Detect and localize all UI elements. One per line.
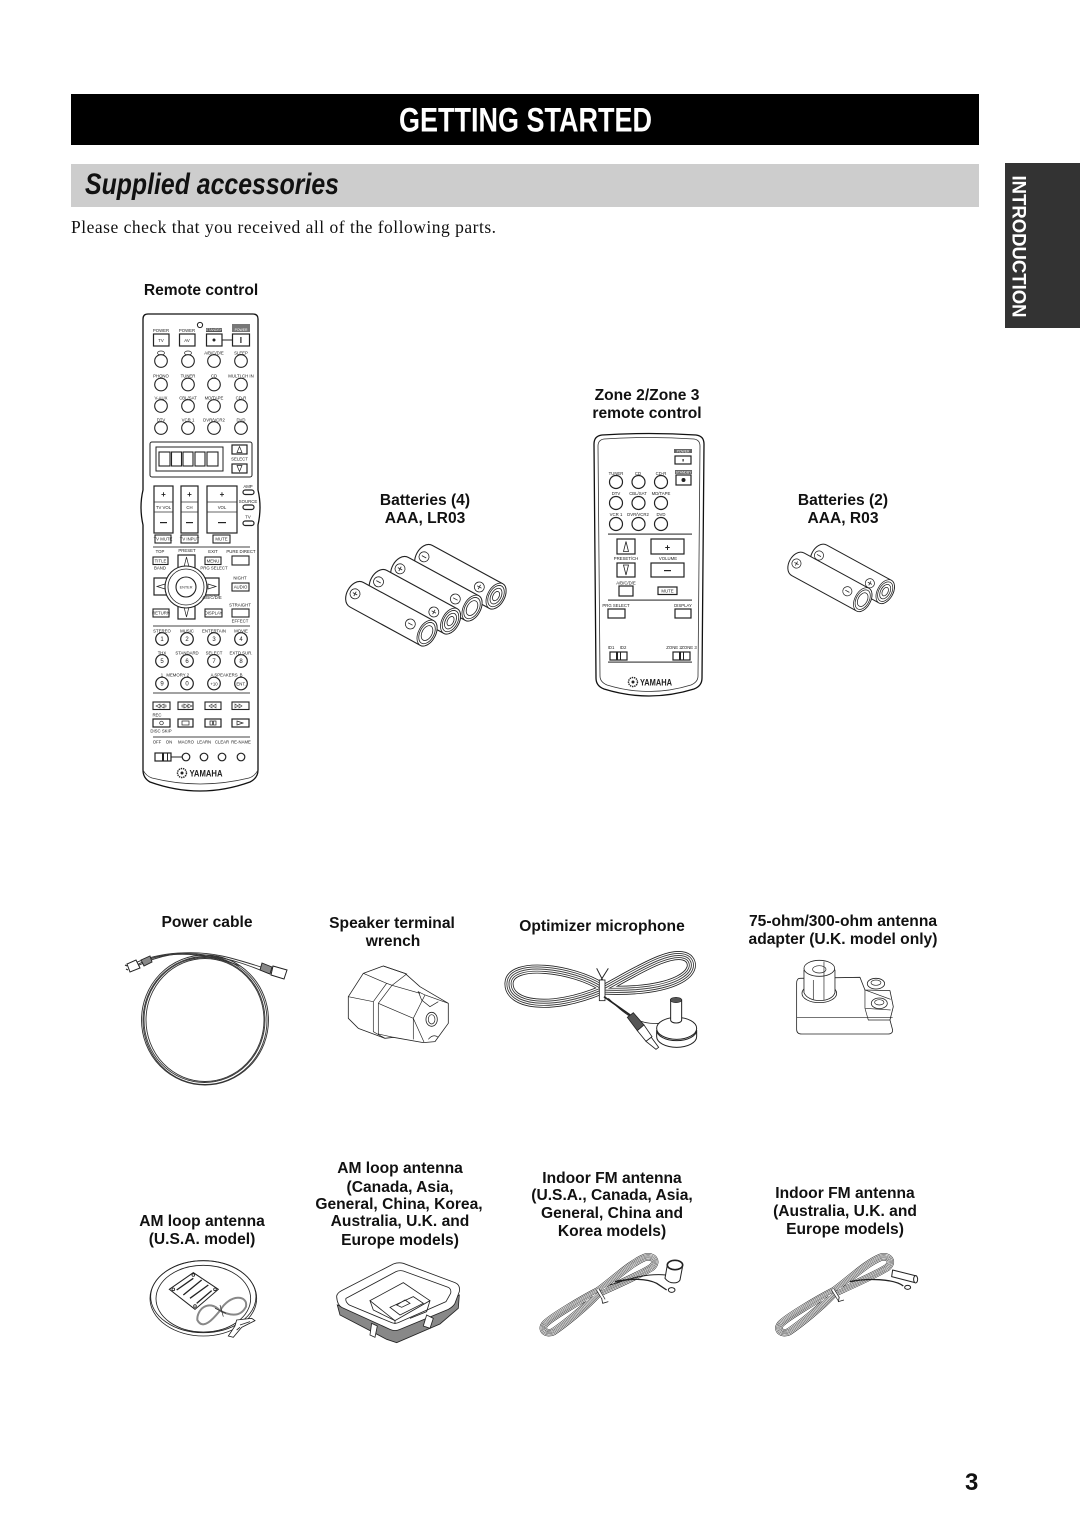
navigation pad: ENTER (180, 586, 193, 590)
volume controls: + (187, 490, 192, 499)
icon: main remote control (141, 314, 260, 791)
icon: two batteries (784, 541, 898, 615)
icon: optimizer microphone (509, 955, 697, 1049)
power buttons: POWER (153, 328, 169, 333)
numeric keypad (153, 628, 252, 694)
title banner (71, 94, 979, 145)
icon: am loop antenna others (337, 1263, 460, 1343)
source buttons: MULTI CH IN (228, 374, 254, 378)
navigation pad: STRAIGHT (229, 602, 251, 608)
zone source buttons: CBL/SAT (629, 491, 647, 496)
icon: four batteries (341, 541, 510, 649)
label: am loop antenna others: Australia, U.K. and (331, 1213, 469, 1230)
source buttons: MD/TAPE (205, 396, 224, 400)
source buttons: DVR/VCR2 (203, 418, 225, 422)
navigation pad: PRG SELECT (200, 566, 228, 570)
icon: am loop antenna us (150, 1261, 257, 1337)
volume controls (154, 484, 257, 533)
logo: yamaha: YAMAHA (640, 678, 672, 688)
zone volume controls: MUTE (661, 588, 674, 594)
zone id switches: ZONE 2 (666, 645, 682, 650)
zone source buttons: CD (635, 471, 641, 476)
macro buttons: ON (166, 740, 172, 744)
title banner: GETTING STARTED (399, 102, 652, 140)
label: indoor fm antenna europe: Indoor FM antenna (775, 1185, 915, 1202)
label: indoor fm antenna asia: Korea models) (558, 1223, 666, 1240)
volume controls: AMP (243, 484, 253, 489)
power buttons: STANDBY (206, 328, 223, 332)
label: batteries 4: AAA, LR03 (385, 510, 466, 527)
icon: zone remote control (594, 434, 704, 696)
zone volume controls: VOLUME (659, 556, 677, 561)
zone volume controls: + (665, 542, 670, 552)
label: zone remote (592, 387, 702, 422)
label: antenna adapter: adapter (U.K. model only) (749, 931, 937, 948)
side tab: introduction (1005, 163, 1080, 328)
navigation pad: PRESET (178, 548, 196, 553)
zone source buttons: CD-R (656, 471, 666, 476)
zone volume controls (602, 539, 692, 618)
power buttons: POWER (235, 328, 248, 332)
numeric keypad: EXTD SUR. (230, 650, 252, 656)
numeric keypad: STEREO (153, 628, 171, 634)
mute row (153, 535, 250, 548)
numeric keypad: 7 (212, 659, 216, 665)
label: am loop antenna others: (Canada, Asia, (347, 1179, 453, 1196)
source buttons: CD (211, 374, 217, 378)
source buttons: CBL/SAT (179, 396, 197, 400)
navigation pad: RETURN (152, 610, 170, 616)
zone id switches: ZONE 3 (681, 645, 697, 650)
mute row: MUTE (215, 536, 228, 542)
label: power cable: Power cable (161, 914, 253, 931)
label: speaker terminal wrench: wrench (365, 933, 420, 950)
numeric keypad: B (240, 672, 243, 678)
macro buttons: RE-NAME (231, 740, 251, 744)
numeric keypad: 0 (185, 682, 189, 688)
power buttons (153, 322, 250, 346)
numeric keypad: 6 (185, 659, 189, 665)
zone volume controls: PRESET/CH (614, 556, 638, 561)
label: indoor fm antenna asia (531, 1170, 693, 1240)
volume controls: + (161, 490, 166, 499)
zone source buttons: POWER (677, 450, 690, 454)
label: antenna adapter: 75-ohm/300-ohm antenna (749, 913, 937, 930)
navigation pad: EXIT (208, 549, 218, 554)
numeric keypad: MOVIE (234, 628, 248, 634)
macro buttons: MACRO (178, 740, 195, 744)
numeric keypad: 1 (161, 672, 164, 678)
numeric keypad: STANDARD (175, 650, 199, 656)
numeric keypad: MEMORY (166, 672, 186, 678)
zone source buttons: MD/TAPE (652, 491, 671, 496)
zone source buttons (608, 449, 692, 535)
label: remote control: Remote control (144, 282, 258, 299)
label: am loop antenna others: AM loop antenna (337, 1160, 463, 1177)
navigation pad: BAND (154, 566, 166, 570)
navigation pad: A/B/C/D/E (202, 595, 222, 600)
label: batteries 2: AAA, R03 (807, 510, 879, 527)
numeric keypad: 8 (239, 659, 243, 665)
zone source buttons: STANDBY (676, 470, 692, 474)
label: zone remote: remote control (592, 405, 702, 422)
zone source buttons: DVD (656, 512, 666, 517)
mute row: TV INPUT (180, 536, 200, 542)
transport buttons (150, 702, 250, 738)
navigation pad: NIGHT (233, 576, 247, 580)
power buttons: TV (158, 338, 164, 343)
zone volume controls: DISPLAY (674, 603, 692, 608)
zone id switches (608, 645, 697, 663)
power buttons: AV (184, 338, 190, 343)
label: antenna adapter (749, 913, 937, 948)
numeric keypad: 5 (160, 659, 164, 665)
label: optimizer microphone: Optimizer microphone (519, 918, 685, 935)
label: batteries 2 (798, 492, 888, 527)
numeric keypad: SELECT (206, 650, 223, 656)
source buttons: A/B/C/D/E (204, 350, 224, 356)
navigation pad (152, 548, 256, 626)
source buttons: SLEEP (234, 350, 248, 356)
label: speaker terminal wrench (329, 915, 455, 950)
label: batteries 4: Batteries (4) (380, 492, 470, 509)
section heading: supplied accessories (71, 164, 979, 207)
logo: yamaha: YAMAHA (190, 768, 223, 780)
volume controls: VOL (218, 505, 227, 510)
zone source buttons: VCR 1 (610, 512, 623, 517)
numeric keypad: 2 (185, 637, 189, 643)
macro buttons: LEARN (197, 740, 211, 744)
numeric keypad: ENT. (236, 682, 246, 686)
intro text: Please check that you received all of the following parts. (71, 217, 496, 237)
source buttons: VCR 1 (182, 418, 195, 422)
zone id switches: ID2 (620, 645, 627, 650)
icon: wrench (348, 966, 448, 1043)
numeric keypad: 3 (212, 637, 216, 643)
zone source buttons: DTV (612, 491, 620, 496)
label: indoor fm antenna europe: (Australia, U.K. and (773, 1203, 917, 1220)
label: indoor fm antenna asia: (U.S.A., Canada, Asia, (531, 1187, 693, 1204)
source buttons: V-AUX (155, 396, 168, 400)
numeric keypad: 9 (160, 682, 164, 688)
source buttons: PHONO (153, 374, 170, 378)
label: speaker terminal wrench: Speaker terminal (329, 915, 455, 932)
numeric keypad: 1 (160, 637, 164, 643)
numeric keypad: ENTERTAIN (202, 628, 226, 634)
numeric keypad: MUSIC (180, 628, 194, 634)
numeric keypad: +10 (210, 682, 218, 686)
numeric keypad: THX (158, 650, 166, 656)
macro buttons: OFF (153, 740, 162, 744)
icon: power cable (125, 953, 287, 1085)
volume controls: + (220, 490, 225, 499)
label: batteries 4 (380, 492, 470, 527)
section heading: supplied accessories: Supplied accessories (85, 168, 339, 201)
macro buttons: CLEAR (215, 740, 229, 744)
display panel: SELECT (231, 456, 248, 462)
transport buttons: REC (152, 712, 162, 718)
power buttons: POWER (179, 328, 195, 333)
numeric keypad: 4 (239, 637, 243, 643)
source buttons: DTV (157, 418, 165, 422)
page number: 3 (965, 1469, 978, 1496)
macro buttons (153, 740, 251, 761)
label: indoor fm antenna europe (773, 1185, 917, 1238)
source buttons: CD-R (236, 396, 246, 400)
label: am loop antenna others: Europe models) (341, 1232, 459, 1249)
label: zone remote: Zone 2/Zone 3 (595, 387, 700, 404)
display panel (150, 442, 252, 477)
zone volume controls: PRG SELECT (602, 603, 630, 608)
label: am loop antenna others: General, China, Korea, (315, 1196, 483, 1213)
numeric keypad: 2 (187, 672, 190, 678)
navigation pad: EFFECT (232, 618, 249, 624)
label: am loop antenna others (315, 1160, 483, 1249)
icon: indoor fm antenna europe (779, 1257, 918, 1333)
label: am loop antenna us: (U.S.A. model) (149, 1231, 255, 1248)
label: indoor fm antenna asia: Indoor FM antenna (542, 1170, 682, 1187)
volume controls: TV (245, 514, 251, 520)
zone source buttons: DVR/VCR2 (627, 512, 649, 517)
label: indoor fm antenna europe: Europe models) (786, 1221, 904, 1238)
volume controls: CH (186, 505, 193, 510)
numeric keypad: SPEAKERS (214, 672, 238, 678)
volume controls: SOURCE (239, 499, 257, 504)
icon: indoor fm antenna asia (543, 1257, 683, 1333)
zone volume controls: A/B/C/D/E (616, 580, 636, 586)
numeric keypad: A (211, 672, 214, 678)
label: batteries 2: Batteries (2) (798, 492, 888, 509)
source buttons: DVD (236, 418, 246, 422)
label: indoor fm antenna asia: General, China and (541, 1205, 683, 1222)
source buttons: TUNER (181, 374, 195, 378)
mute row: TV MUTE (154, 536, 173, 542)
zone source buttons: TUNER (609, 471, 623, 476)
navigation pad: TOP (156, 549, 165, 554)
logo: yamaha (628, 678, 672, 688)
navigation pad: AUDIO (234, 584, 248, 590)
navigation pad: TITLE (155, 558, 166, 564)
label: am loop antenna us: AM loop antenna (139, 1213, 265, 1230)
label: am loop antenna us (139, 1213, 265, 1248)
logo: yamaha (178, 768, 223, 780)
navigation pad: MENU (207, 558, 219, 564)
icon: antenna adapter (797, 960, 893, 1034)
navigation pad: PURE DIRECT (226, 549, 256, 554)
source buttons (153, 350, 254, 434)
transport buttons: DISC SKIP (150, 728, 172, 734)
volume controls: TV VOL (156, 505, 172, 510)
side tab: introduction: INTRODUCTION (1008, 176, 1028, 318)
zone id switches: ID1 (608, 645, 615, 650)
navigation pad: DISPLAY (205, 610, 223, 616)
